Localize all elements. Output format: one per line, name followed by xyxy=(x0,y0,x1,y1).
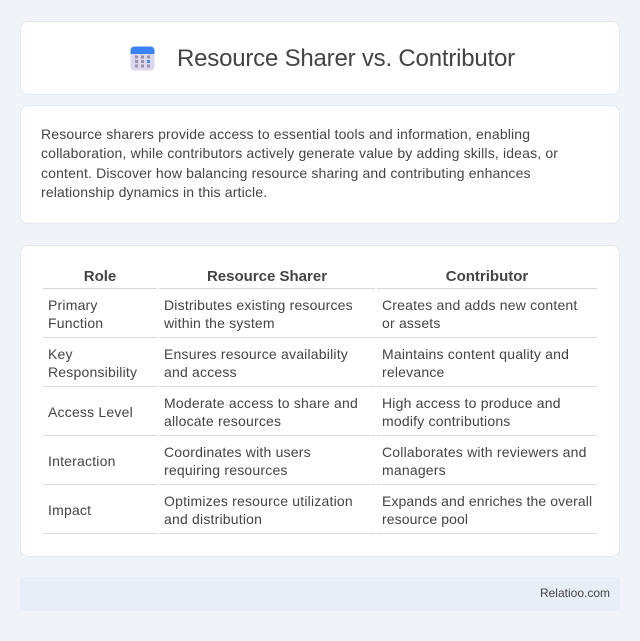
title: Resource Sharer vs. Contributor xyxy=(177,45,515,72)
intro text: content. Discover how balancing resource sharing and contributing enhances xyxy=(41,165,531,181)
row: interaction: managers xyxy=(382,462,446,478)
row: impact xyxy=(48,493,592,527)
row: access level: Access Level xyxy=(48,404,133,420)
row: key responsibility: and access xyxy=(164,364,237,380)
row: key responsibility: Maintains content quality and xyxy=(382,346,569,362)
row: access level: allocate resources xyxy=(164,413,281,429)
row: interaction: Collaborates with reviewers and xyxy=(382,444,587,460)
row: primary function: Distributes existing resources xyxy=(164,297,353,313)
row: interaction xyxy=(48,444,587,478)
row: primary function: within the system xyxy=(164,315,275,331)
row: impact: resource pool xyxy=(382,511,468,527)
row: impact: Expands and enriches the overall xyxy=(382,493,592,509)
intro text: collaboration, while contributors actively generate value by adding skills, ideas, or xyxy=(41,145,558,161)
intro text xyxy=(41,126,558,200)
table header: Role xyxy=(84,268,116,285)
row: access level: modify contributions xyxy=(382,413,511,429)
row: impact: Optimizes resource utilization xyxy=(164,493,353,509)
footer xyxy=(20,577,620,611)
row: impact: Impact xyxy=(48,502,91,518)
row: primary function: or assets xyxy=(382,315,441,331)
row: primary function: Function xyxy=(48,315,103,331)
row: interaction: requiring resources xyxy=(164,462,288,478)
row: key responsibility xyxy=(48,346,569,380)
row: primary function xyxy=(48,297,578,331)
icon: calendar xyxy=(130,46,154,70)
row: access level: Moderate access to share and xyxy=(164,395,358,411)
row: access level: High access to produce and xyxy=(382,395,561,411)
table header xyxy=(84,268,528,285)
panel: comparison table xyxy=(20,245,620,557)
row: impact: and distribution xyxy=(164,511,262,527)
row: primary function: Primary xyxy=(48,297,98,313)
panel: introduction xyxy=(20,105,620,224)
row: primary function: Creates and adds new content xyxy=(382,297,578,313)
footer brand: Relatioo.com xyxy=(540,586,610,600)
row: key responsibility: Key xyxy=(48,346,73,362)
row: access level xyxy=(48,395,561,429)
row: key responsibility: Ensures resource availability xyxy=(164,346,348,362)
table header: Contributor xyxy=(446,268,528,285)
panel: header xyxy=(20,21,620,95)
row: key responsibility: relevance xyxy=(382,364,445,380)
row: key responsibility: Responsibility xyxy=(48,364,137,380)
row: interaction: Interaction xyxy=(48,453,116,469)
intro text: Resource sharers provide access to essential tools and information, enabling xyxy=(41,126,530,142)
table header: Resource Sharer xyxy=(207,268,327,285)
row: interaction: Coordinates with users xyxy=(164,444,311,460)
intro text: relationship dynamics in this article. xyxy=(41,184,267,200)
